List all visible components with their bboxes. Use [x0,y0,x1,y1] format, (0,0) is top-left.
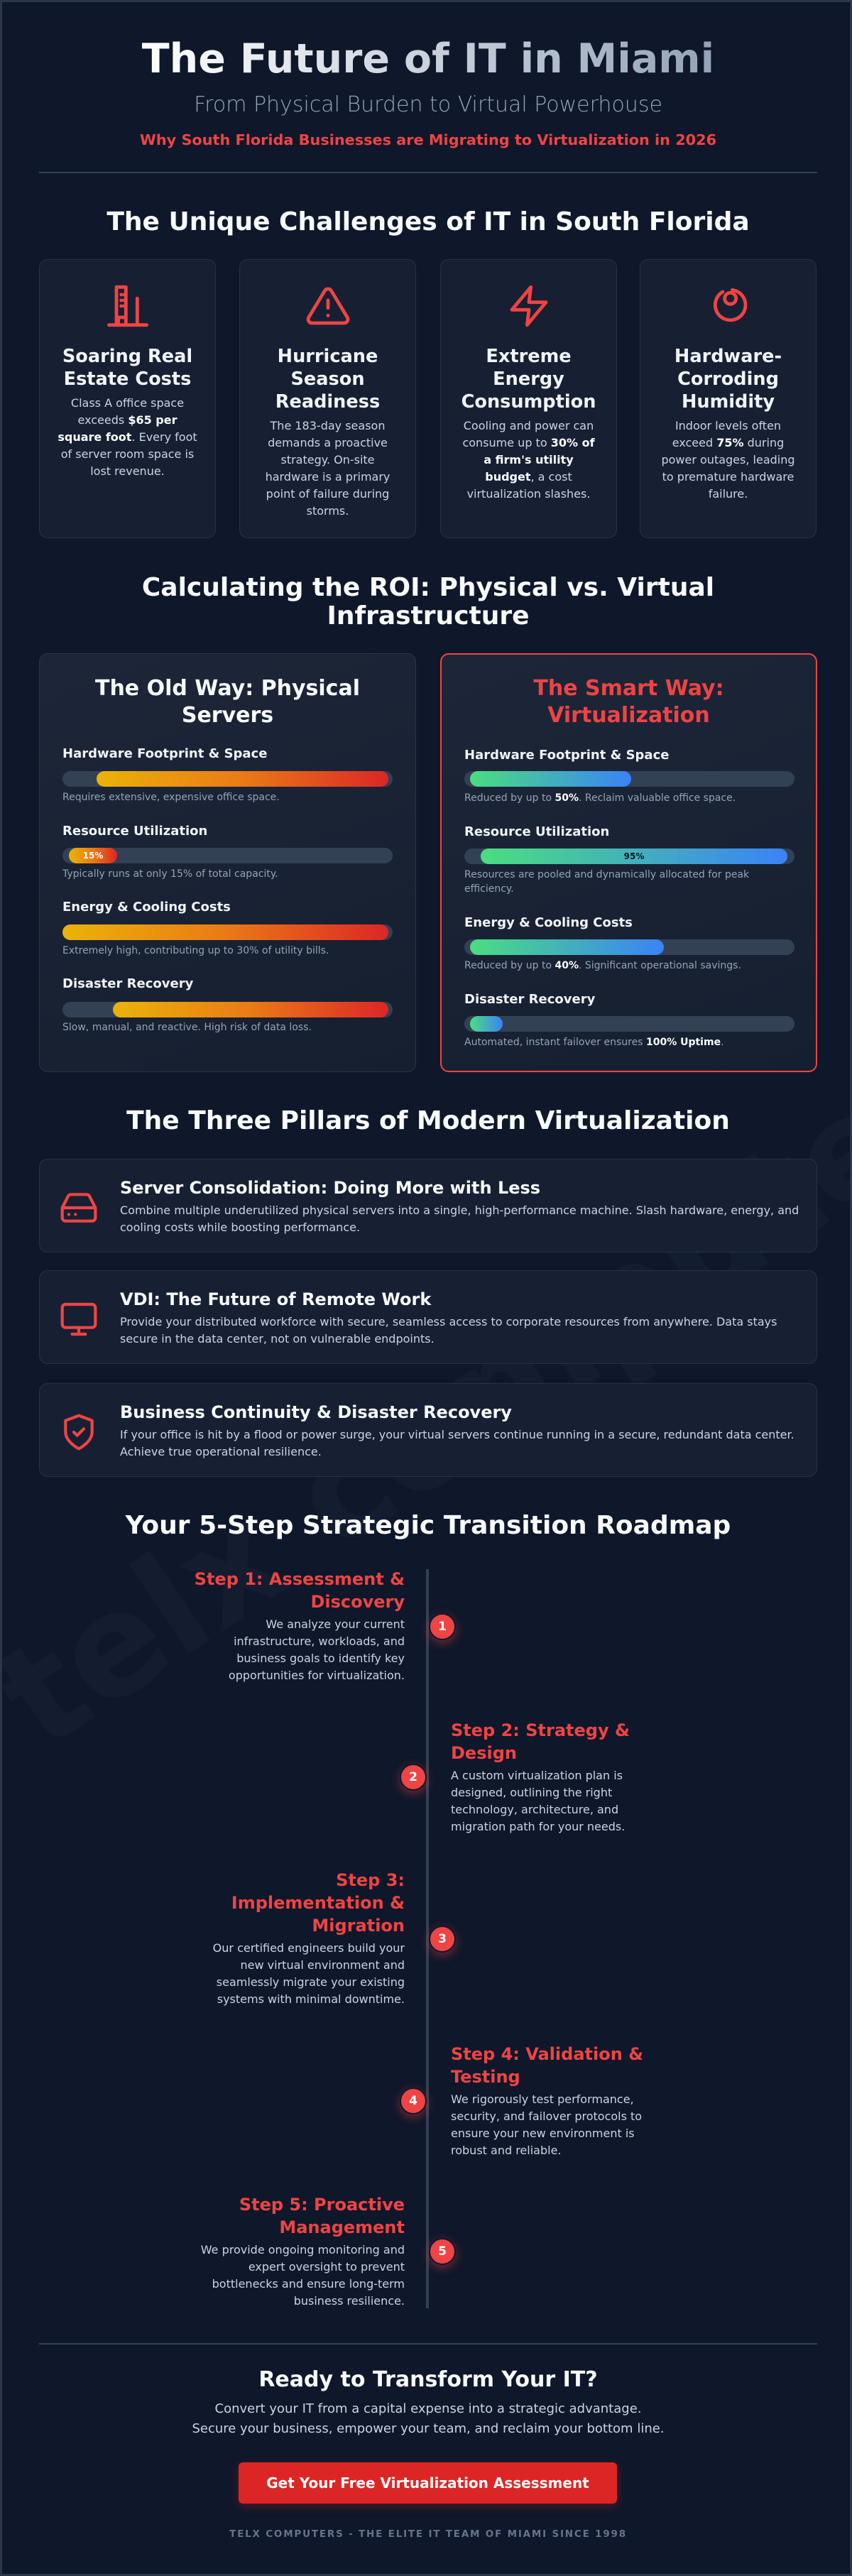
marker 5 [429,2238,456,2265]
pillar: continuity: Business Continuity & Disaster Recovery [120,1402,512,1422]
icon: hard drive [61,1193,97,1223]
panel: old way: Typically runs at only 15% of total capacity. [62,868,278,880]
marker 4: 4 [409,2094,417,2108]
footer: TELX COMPUTERS - THE ELITE IT TEAM OF MIAMI SINCE 1998 [229,2528,627,2540]
heading: challenges: The Unique Challenges of IT in South Florida [106,207,750,236]
tagline: Why South Florida Businesses are Migrating to Virtualization in 2026 [140,131,716,148]
icon: warning [307,287,349,325]
panel: smart way [440,653,817,1072]
step 3 [213,1870,405,2006]
marker 1 [429,1613,456,1640]
heading: pillars: The Three Pillars of Modern Virtualization [126,1106,730,1135]
step 5 [201,2195,405,2308]
marker 2 [400,1764,427,1791]
CTA button: Get Your Free Virtualization Assessment [266,2474,589,2492]
step 2: Step 2: Strategy & Design [451,1720,630,1763]
step 1: Step 1: Assessment & Discovery [195,1569,405,1612]
panel: smart way: Resource Utilization [464,824,609,839]
heading: roadmap: Your 5-Step Strategic Transition Roadmap [126,1511,731,1540]
pillar: continuity [39,1383,817,1477]
panel: old way: Slow, manual, and reactive. High risk of data loss. [62,1022,312,1033]
card: energy [440,259,617,538]
step 3: Step 3: Implementation & Migration [231,1870,405,1936]
panel: old way [39,653,416,1072]
panel: old way: Energy & Cooling Costs [62,900,231,915]
card: real estate: Class A office space exceeds $65 per square foot. Every foot of server room space is lost revenue. [58,396,197,478]
step 5: Step 5: Proactive Management [239,2195,405,2237]
CTA text: Convert your IT from a capital expense into a strategic advantage. [214,2401,642,2416]
card: energy: Cooling and power can consume up to 30% of a firm's utility budget, a cost virtualization slashes. [462,419,595,501]
step 2 [451,1720,630,1833]
icon: monitor [61,1302,97,1336]
panel: smart way: Disaster Recovery [464,992,595,1007]
panel: old way: Disaster Recovery [62,976,193,991]
step 1 [195,1569,405,1682]
card: hurricane [239,259,416,538]
step 3: Our certified engineers build your new virtual environment and seamlessly migrate your existing systems with minimal downtime. [213,1941,405,2006]
pillar: VDI [39,1270,817,1364]
icon: lightning [510,285,548,327]
card: real estate [39,259,216,538]
marker 3: 3 [438,1932,447,1946]
card: humidity: Indoor levels often exceed 75% during power outages, leading to premature hardware failure. [661,419,795,501]
step 4 [451,2044,643,2157]
icon: building [106,285,149,327]
subtitle: From Physical Burden to Virtual Powerhouse [194,92,662,117]
panel: smart way: Reduced by up to 50%. Reclaim valuable office space. [464,792,736,804]
pillar: consolidation [39,1159,817,1252]
panel: old way: The Old Way: Physical Servers [95,676,360,728]
pillar: VDI: VDI: The Future of Remote Work [120,1289,431,1309]
panel: smart way: The Smart Way: Virtualization [533,676,724,728]
step 2: A custom virtualization plan is designed, outlining the right technology, architecture, and migration path for your needs. [451,1769,625,1833]
panel: smart way: Reduced by up to 40%. Significant operational savings. [464,960,741,971]
card: hurricane: Hurricane Season Readiness [275,346,380,413]
title: The Future of IT in Miami [142,36,714,82]
CTA text [192,2401,665,2436]
step 1: We analyze your current infrastructure, workloads, and business goals to identify key opportunities for virtualization. [229,1617,405,1682]
pillar: consolidation: Combine multiple underutilized physical servers into a single, high-performance machine. Slash hardware, energy, and cooling costs while boosting performance. [120,1204,799,1234]
icon: shield check [64,1414,94,1450]
card: humidity: Hardware-Corroding Humidity [674,346,782,413]
panel: old way: Requires extensive, expensive office space. [62,792,280,803]
panel: smart way: Hardware Footprint & Space [464,748,669,763]
card: hurricane: The 183-day season demands a proactive strategy. On-site hardware is a primary point of failure during storms. [266,419,390,518]
step 5: We provide ongoing monitoring and expert oversight to prevent bottlenecks and ensure long-term business resilience. [201,2243,405,2308]
marker 4 [400,2087,427,2114]
CTA button [239,2462,617,2504]
pillar: continuity: If your office is hit by a flood or power surge, your virtual servers continue running in a secure, redundant data center. Achieve true operational resilience. [120,1428,794,1458]
heading: ROI: Calculating the ROI: Physical vs. Virtual Infrastructure [142,573,714,631]
marker 1: 1 [438,1620,447,1634]
panel: old way: Extremely high, contributing up to 30% of utility bills. [62,945,329,956]
panel: old way: Resource Utilization [62,824,207,839]
marker 2: 2 [409,1770,417,1784]
card: humidity [640,259,816,538]
pillar: consolidation: Server Consolidation: Doing More with Less [120,1178,540,1198]
card: energy: Extreme Energy Consumption [462,346,596,413]
panel: smart way: Resources are pooled and dynamically allocated for peak efficiency. [464,869,749,895]
panel: old way: Hardware Footprint & Space [62,746,267,761]
panel: old way: 15% [83,851,103,861]
panel: smart way: 95% [624,851,644,861]
CTA heading: Ready to Transform Your IT? [258,2367,598,2392]
marker 3 [429,1926,456,1953]
pillar: VDI: Provide your distributed workforce with secure, seamless access to corporate resources from anywhere. Data stays secure in the data center, not on vulnerable endpoints. [120,1315,777,1346]
marker 5: 5 [438,2244,447,2259]
step 4: Step 4: Validation & Testing [451,2044,643,2087]
card: real estate: Soaring Real Estate Costs [62,346,192,390]
step 4: We rigorously test performance, security, and failover protocols to ensure your new environment is robust and reliable. [451,2092,642,2157]
panel: smart way: Automated, instant failover ensures 100% Uptime. [464,1037,724,1048]
CTA text: Secure your business, empower your team, and reclaim your bottom line. [192,2421,665,2436]
panel: smart way: Energy & Cooling Costs [464,915,633,930]
icon: humidity [713,288,747,322]
